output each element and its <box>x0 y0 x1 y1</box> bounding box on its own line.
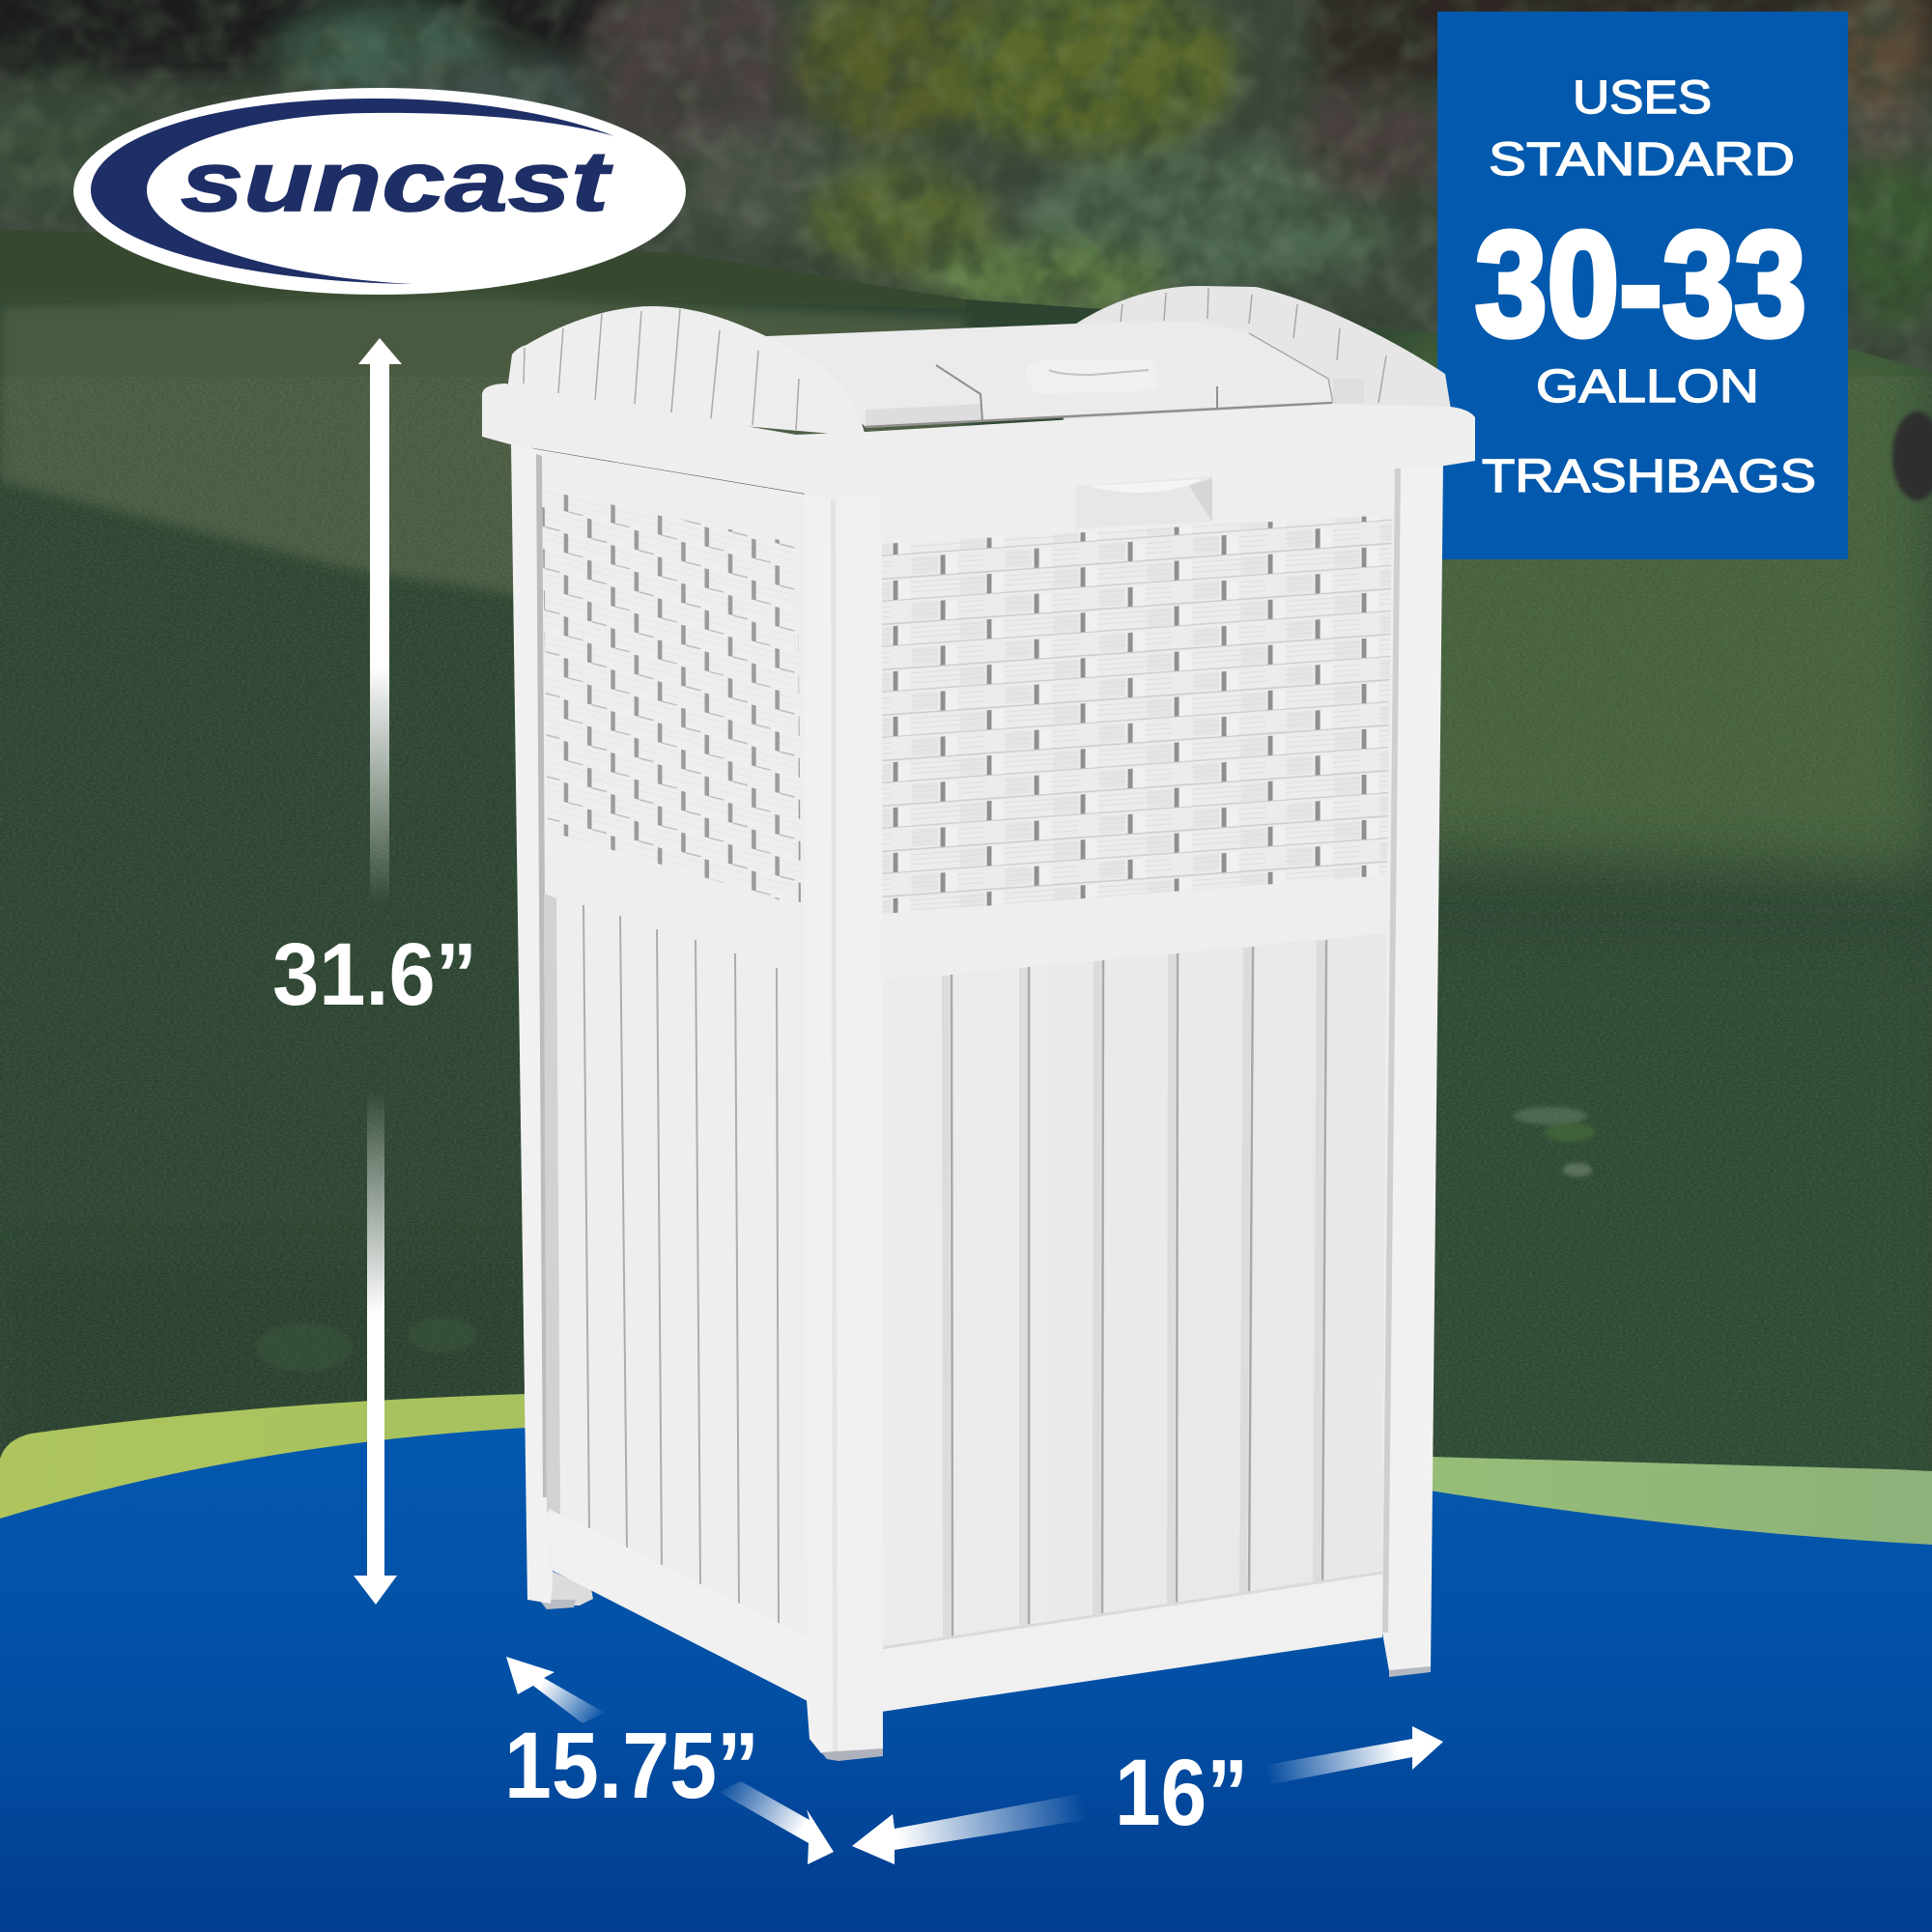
right post <box>1382 460 1443 1671</box>
left slat panel <box>544 894 811 1642</box>
green rim behind blue floor <box>0 1394 1932 1546</box>
panel text: uses standard: USES <box>1573 72 1712 124</box>
front corner post <box>805 493 883 1761</box>
panel background <box>1437 12 1848 559</box>
foliage band <box>0 0 1932 377</box>
back left leg and foot <box>539 1569 593 1609</box>
flap front seam <box>866 403 1332 427</box>
rock at right edge <box>1892 412 1932 500</box>
product: wicker trash bin <box>482 286 1475 1761</box>
panel number: 30-33: 30-33 <box>1475 201 1806 367</box>
right bottom rail <box>881 1573 1382 1712</box>
left woven panel <box>542 490 801 906</box>
left bottom rail <box>549 1509 810 1702</box>
left dome <box>508 306 866 437</box>
left side base <box>536 449 836 1710</box>
right dome <box>1063 286 1452 425</box>
logo wordmark: suncast <box>181 133 613 229</box>
height arrow shaft top <box>370 364 389 903</box>
panel text: uses standard: STANDARD <box>1489 134 1795 185</box>
height arrow shaft bottom <box>367 1091 384 1577</box>
lid lip <box>482 384 1475 499</box>
blue floor <box>0 1428 1932 1932</box>
right side base <box>874 462 1399 1712</box>
depth label: 15.75” <box>504 1713 759 1818</box>
suncast logo <box>73 88 686 295</box>
left post <box>511 442 553 1604</box>
foliage light mottling <box>0 0 1932 377</box>
panel text: gallon trashbags <box>1482 361 1816 502</box>
panel text: gallon trashbags: TRASHBAGS <box>1482 451 1816 502</box>
width arrow: left <box>852 1793 1085 1864</box>
panel text: gallon trashbags: GALLON <box>1536 361 1759 412</box>
lawn light and shadow bands <box>0 222 1932 1546</box>
photo background: garden and lawn <box>0 0 1932 1471</box>
lid <box>482 286 1475 528</box>
width arrow: right <box>1266 1726 1443 1785</box>
height arrow head top <box>358 338 402 364</box>
front post foot pad <box>821 1748 883 1761</box>
height label: 31.6” <box>272 925 477 1024</box>
width label: 16” <box>1115 1740 1248 1845</box>
lid latch <box>1076 476 1212 528</box>
depth arrow: down right <box>719 1781 834 1864</box>
logo ellipse <box>73 88 686 295</box>
right slat panel <box>882 933 1386 1650</box>
lid handle <box>1026 359 1157 394</box>
logo swoosh <box>91 99 614 284</box>
height arrow <box>354 338 402 1605</box>
grass texture <box>0 377 1932 1575</box>
foliage dark mottling <box>0 0 1932 377</box>
right woven panel <box>882 515 1392 914</box>
blue capacity panel <box>1437 12 1848 559</box>
blurred plant near the floor <box>256 1107 1595 1372</box>
lid top flaps <box>766 322 1333 427</box>
depth arrow: up left <box>506 1657 605 1723</box>
left post shadow stripe <box>536 454 549 1497</box>
height arrow head bottom <box>354 1576 397 1605</box>
panel text: uses standard <box>1489 72 1795 185</box>
